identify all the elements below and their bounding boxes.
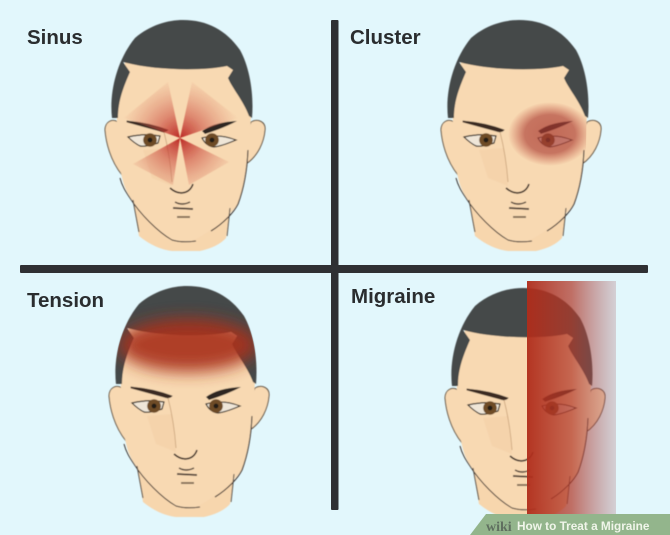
label: tension: Tension [27, 289, 104, 312]
divider: vertical [331, 20, 338, 510]
migraine pain band [527, 281, 616, 514]
cluster pain area [510, 103, 586, 165]
tension pain area [118, 318, 258, 372]
sinus pain wedges [124, 82, 238, 185]
label: migraine: Migraine [351, 285, 435, 308]
head: migraine [445, 288, 605, 519]
wikihow banner: How to Treat a Migraine [517, 519, 650, 533]
divider: horizontal [20, 265, 648, 273]
wikihow banner [470, 514, 670, 535]
label: cluster: Cluster [350, 26, 421, 49]
wikihow banner: wiki [486, 520, 512, 535]
label: sinus: Sinus [27, 26, 83, 49]
head: tension [109, 286, 269, 517]
head: sinus [105, 20, 265, 251]
head: cluster [441, 20, 601, 251]
